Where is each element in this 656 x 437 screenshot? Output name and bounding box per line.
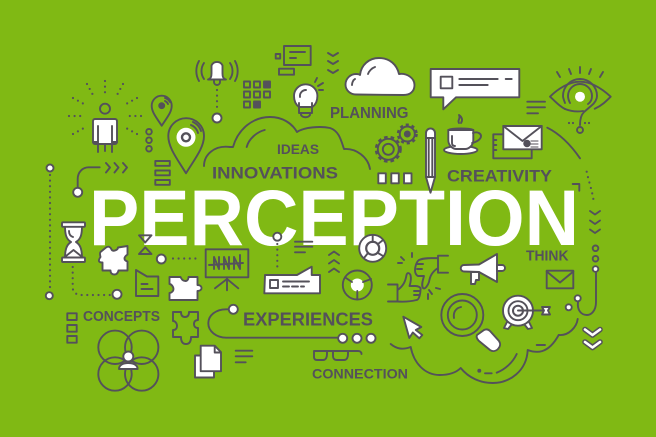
dotted connector with node — [273, 233, 281, 268]
heading: innovations: INNOVATIONS — [212, 163, 338, 182]
icon: bell — [196, 61, 238, 122]
hook line with dots — [566, 246, 598, 315]
icon: small map pin — [152, 96, 172, 126]
heading: concepts: CONCEPTS — [83, 309, 160, 325]
chevrons down right — [590, 211, 600, 233]
icon: envelope — [493, 126, 542, 158]
icon: thumbs up and down — [388, 253, 448, 302]
icon: circular chart — [343, 270, 372, 300]
icon: white puzzle piece — [99, 246, 128, 274]
icon: megaphone — [461, 254, 505, 284]
heading: connection: CONNECTION — [312, 366, 408, 381]
dots — [146, 129, 152, 152]
icon: three squares — [378, 173, 412, 183]
icon: light bulb — [294, 78, 323, 117]
icon: mail — [547, 271, 573, 288]
title: PERCEPTION — [89, 173, 579, 262]
icon: gears — [376, 125, 416, 161]
dotted line right — [587, 172, 594, 204]
icon: pencil — [426, 128, 435, 193]
icon: target with arrow — [503, 296, 550, 329]
heading: creativity: CREATIVITY — [447, 167, 553, 186]
icon: outline puzzle piece — [173, 312, 198, 344]
icon: glasses — [314, 351, 362, 360]
text lines — [236, 351, 252, 362]
icon: document note — [136, 270, 158, 296]
icon: eye with question mark — [550, 67, 611, 133]
icon: presentation board — [206, 249, 248, 290]
dotted connector to chart — [157, 254, 198, 264]
icon: white chevrons — [585, 330, 600, 348]
text lines — [527, 102, 545, 113]
icon: magnifying glass — [441, 294, 500, 351]
icon: white puzzle piece 2 — [170, 277, 202, 300]
icon: triangles — [139, 235, 152, 254]
text lines — [295, 242, 312, 252]
icon: cursor arrow — [403, 317, 422, 338]
icon: overlapping circles with person — [98, 331, 158, 391]
icon: coffee cup — [444, 115, 481, 154]
dotted line and dots left — [46, 164, 54, 299]
icon: ticket card — [264, 267, 320, 293]
icon: three small boxes — [67, 313, 77, 343]
icon: monitor — [276, 46, 311, 75]
curved line with dots — [208, 305, 376, 343]
icon: cloud — [346, 58, 414, 95]
icon: hourglass — [62, 222, 85, 262]
icon: documents — [195, 346, 221, 378]
icon: donut chart — [359, 235, 386, 262]
arc lines right — [547, 128, 580, 191]
heading: ideas: IDEAS — [277, 141, 319, 157]
icon: person with rays — [69, 81, 141, 152]
icon: large map pin — [168, 118, 204, 173]
heading: think: THINK — [526, 249, 569, 265]
chevrons top — [328, 53, 338, 73]
icon: idea cloud — [204, 117, 370, 169]
heading: planning: PLANNING — [330, 105, 408, 122]
heading: experiences: EXPERIENCES — [243, 309, 373, 330]
icon: key grid — [244, 82, 270, 108]
icon: speech bubble — [431, 69, 519, 109]
icon: bottom cloud — [391, 319, 578, 383]
curved line with chevrons — [73, 163, 127, 197]
chevrons up — [329, 252, 339, 272]
icon: stacked bars — [155, 161, 170, 185]
dotted connector — [73, 267, 122, 299]
